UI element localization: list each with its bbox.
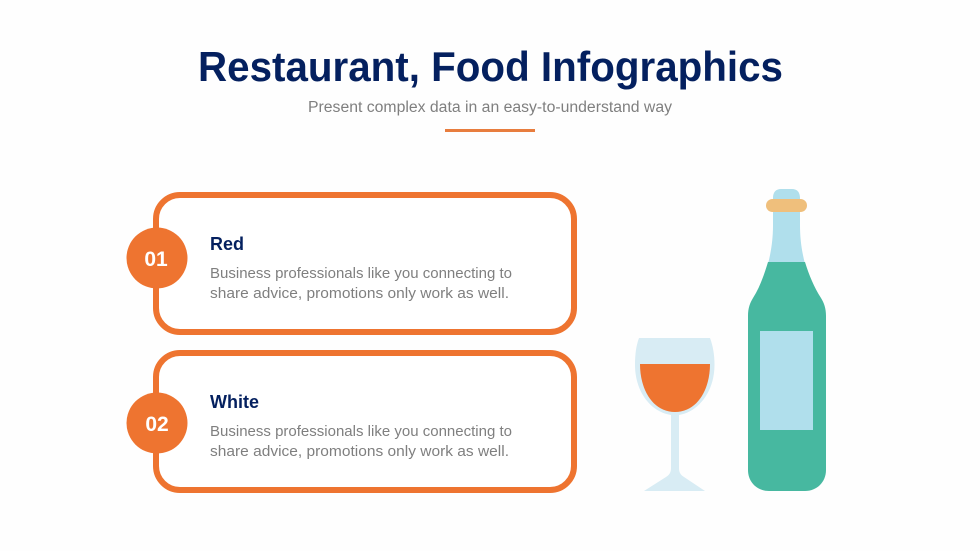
panel: white [126,353,574,490]
bottle body [748,262,826,491]
body text: red: share advice, promotions only work as well. [210,285,509,302]
bottle cork band [766,199,807,212]
number badge 01: 01 [144,248,168,271]
number badge 02: 02 [145,413,169,436]
bottle label [760,331,813,430]
panel: red [126,195,574,332]
card outline: red [156,195,574,332]
number badge 02 [126,392,188,454]
heading: red: Red [210,234,244,254]
title underline [445,129,535,132]
card outline: white [156,353,574,490]
wine [640,364,710,412]
icon: wine bottle [748,189,826,491]
title: Restaurant, Food Infographics [198,43,783,90]
number badge 01 [126,228,188,288]
body text: white: share advice, promotions only work as well. [210,443,509,460]
bottle neck [768,189,805,264]
icon: wine glass [635,338,714,491]
body text: white: Business professionals like you connecting to [210,423,512,440]
body text: red: Business professionals like you connecting to [210,265,512,282]
heading: white: White [210,392,259,412]
subtitle: Present complex data in an easy-to-understand way [308,99,672,116]
